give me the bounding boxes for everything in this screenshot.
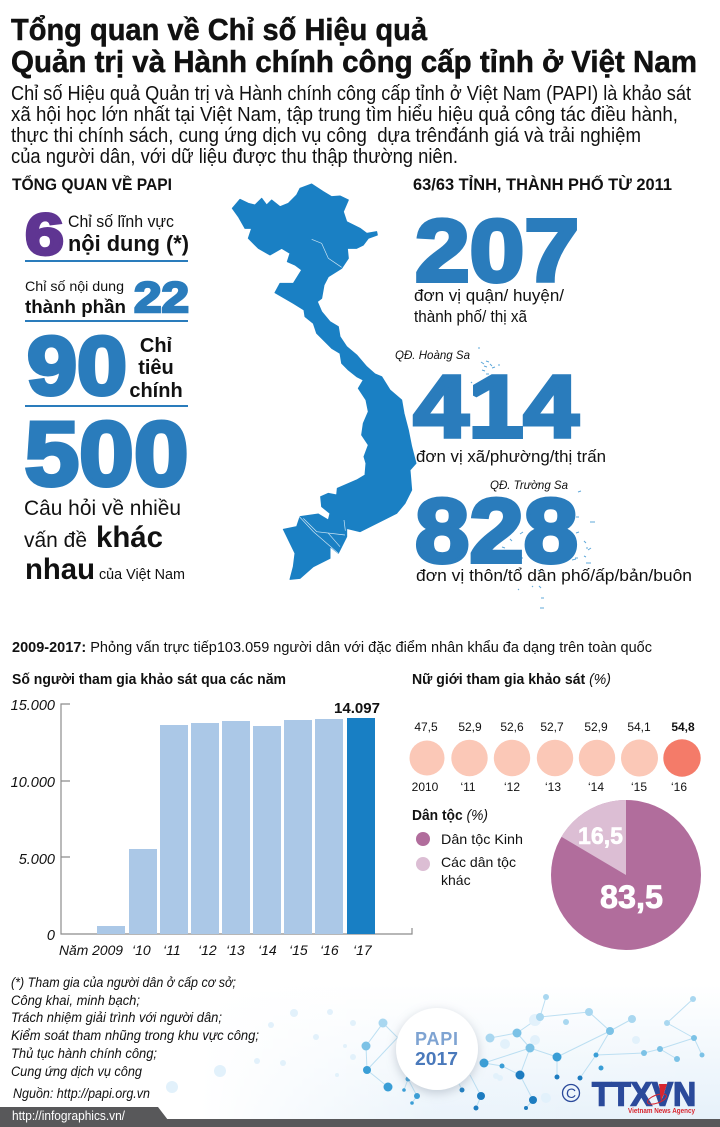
pie chart	[551, 800, 701, 950]
stat: 207: thành phố/ thị xã	[414, 307, 527, 326]
stat: 22 component indices	[25, 274, 189, 322]
stat: 90 main indicators: chính	[129, 380, 183, 402]
stat: 6 content indices: nội dung (*)	[68, 231, 189, 256]
value label: 14.097	[334, 701, 380, 717]
percent values: 52,9	[458, 720, 482, 734]
stat: 22 component indices: Chỉ số nội dung	[25, 278, 124, 294]
stat: 90 main indicators: tiêu	[138, 357, 174, 379]
year labels: ‘12	[504, 780, 520, 794]
footnote list: (*) Tham gia của người dân ở cấp cơ sở;	[11, 975, 236, 990]
panel: participants bar chart	[11, 672, 412, 958]
pie chart: 16,5	[578, 823, 623, 850]
bubbles	[410, 739, 701, 777]
stat: 6 content indices: 6	[25, 202, 64, 268]
map of Vietnam	[232, 184, 595, 608]
panel: overview of PAPI	[12, 175, 189, 586]
percent values	[414, 720, 695, 734]
badge: PAPI 2017	[396, 1008, 478, 1090]
stat: 828: 828	[415, 481, 578, 582]
chart title: Số người tham gia khảo sát qua các năm	[12, 672, 286, 688]
year labels: ‘14	[588, 780, 604, 794]
footnote list: Kiểm soát tham nhũng trong khu vực công;	[11, 1028, 259, 1043]
y axis labels: 5.000	[19, 852, 55, 868]
title: Tổng quan về Chỉ số Hiệu quả	[11, 12, 428, 47]
stat: 414	[414, 357, 606, 466]
legend: Các dân tộc	[441, 854, 516, 870]
survey summary line: 2009-2017: Phỏng vấn trực tiếp103.059 người dân với đặc điểm nhân khẩu đa dạng trên toàn quốc	[12, 640, 652, 656]
x axis labels: ‘17	[353, 942, 373, 958]
year labels: ‘11	[460, 780, 476, 794]
panel: administrative units	[395, 174, 692, 585]
badge: PAPI 2017: 2017	[415, 1049, 458, 1069]
stat: 500 questions: khác	[96, 521, 163, 554]
rivers	[299, 239, 345, 553]
percent values: 54,1	[627, 720, 651, 734]
pie chart: 83,5	[600, 879, 663, 915]
stat: 500 questions: nhau	[25, 553, 95, 586]
year labels: 2010	[412, 780, 439, 794]
stat: 500 questions	[24, 404, 188, 586]
stat: 90 main indicators: 90	[27, 319, 127, 412]
x axis labels	[59, 942, 373, 958]
stat: 22 component indices: thành phần	[25, 297, 126, 317]
x axis labels: ‘11	[163, 942, 181, 958]
stat: 90 main indicators: Chỉ	[140, 335, 173, 357]
legend: khác	[441, 872, 471, 888]
x axis labels: ‘12	[198, 942, 217, 958]
panel: ethnicity pie	[412, 800, 701, 950]
logo: TTXVN: Vietnam News Agency	[628, 1108, 695, 1115]
x axis labels: Năm 2009	[59, 942, 123, 958]
title	[11, 12, 697, 79]
stat: 828: đơn vị thôn/tổ dân phố/ấp/bản/buôn	[416, 566, 692, 585]
x axis labels: ‘15	[289, 942, 308, 958]
stat: 22 component indices: 22	[134, 274, 189, 322]
y axis labels: 10.000	[11, 775, 55, 791]
year labels	[412, 780, 687, 794]
intro text block	[11, 83, 691, 168]
year labels: ‘15	[631, 780, 647, 794]
intro text block: xã hội học lớn nhất tại Việt Nam, tập trung tìm hiểu hiệu quả công tác điều hành,	[11, 104, 678, 126]
panel: female participation	[410, 672, 701, 794]
source: Nguồn: http://papi.org.vn	[13, 1086, 150, 1101]
stat: 500 questions: của Việt Nam	[99, 567, 185, 583]
footnote list	[11, 975, 259, 1079]
footnote list: Thủ tục hành chính công;	[11, 1046, 157, 1061]
intro text block: của người dân, với dữ liệu được thu thập thường niên.	[11, 146, 458, 168]
footer band	[0, 1107, 720, 1127]
heading: overview: TỔNG QUAN VỀ PAPI	[12, 175, 172, 194]
badge: PAPI 2017: PAPI	[415, 1029, 458, 1049]
percent values: 52,6	[500, 720, 524, 734]
x axis labels: ‘13	[226, 942, 245, 958]
stat: 90 main indicators	[27, 319, 183, 412]
x axis labels: ‘16	[320, 942, 339, 958]
background: footer tint	[200, 985, 720, 1120]
stat: 414: đơn vị xã/phường/thị trấn	[416, 447, 606, 466]
intro text block: thực thi chính sách, cung ứng dịch vụ công dựa trênđánh giá và trải nghiệm	[11, 125, 641, 147]
x axis labels: ‘14	[258, 942, 277, 958]
stat: 500 questions: 500	[24, 404, 188, 505]
percent values: 52,9	[584, 720, 608, 734]
label: Hoang Sa: QĐ. Hoàng Sa	[395, 348, 470, 362]
legend: Dân tộc Kinh	[441, 831, 523, 847]
heading: provinces: 63/63 TỈNH, THÀNH PHỐ TỪ 2011	[413, 174, 672, 194]
y axis labels: 15.000	[11, 698, 55, 714]
x axis labels: ‘10	[132, 942, 151, 958]
footnote list: Trách nhiệm giải trình với người dân;	[11, 1010, 222, 1025]
y axis labels	[11, 698, 55, 944]
percent values: 47,5	[414, 720, 438, 734]
chart axes	[61, 704, 412, 934]
network illustration	[166, 994, 704, 1110]
islands: Truong Sa	[502, 491, 595, 608]
stat: 6 content indices	[25, 202, 189, 268]
footnote list: Cung ứng dịch vụ công	[11, 1064, 142, 1079]
heading: female participation: Nữ giới tham gia khảo sát (%)	[412, 672, 611, 688]
heading: ethnicity: Dân tộc (%)	[412, 808, 488, 824]
year labels: ‘13	[545, 780, 561, 794]
label: Truong Sa: QĐ. Trường Sa	[490, 478, 568, 492]
stat: 500 questions: Câu hỏi về nhiều	[24, 496, 181, 520]
stat: 207: 207	[415, 201, 579, 300]
logo: TTXVN: C	[566, 1085, 576, 1101]
footer band: http://infographics.vn/	[12, 1109, 125, 1123]
year labels: ‘16	[671, 780, 687, 794]
title: Quản trị và Hành chính công cấp tỉnh ở Việt Nam	[11, 44, 697, 79]
bars	[97, 718, 375, 934]
islands: Hoang Sa	[471, 348, 500, 383]
percent values: 52,7	[540, 720, 564, 734]
logo: TTXVN: TTXVN	[592, 1076, 696, 1112]
stat: 207: đơn vị quận/ huyện/	[414, 286, 564, 305]
y axis labels: 0	[47, 928, 55, 944]
legend	[416, 831, 523, 888]
stat: 414: 414	[414, 357, 579, 456]
percent values: 54,8	[671, 720, 695, 734]
stat: 500 questions: vấn đề	[24, 528, 87, 552]
footnote list: Công khai, minh bạch;	[11, 993, 140, 1008]
stat: 828	[415, 481, 692, 585]
stat: 6 content indices: Chỉ số lĩnh vực	[68, 213, 174, 231]
